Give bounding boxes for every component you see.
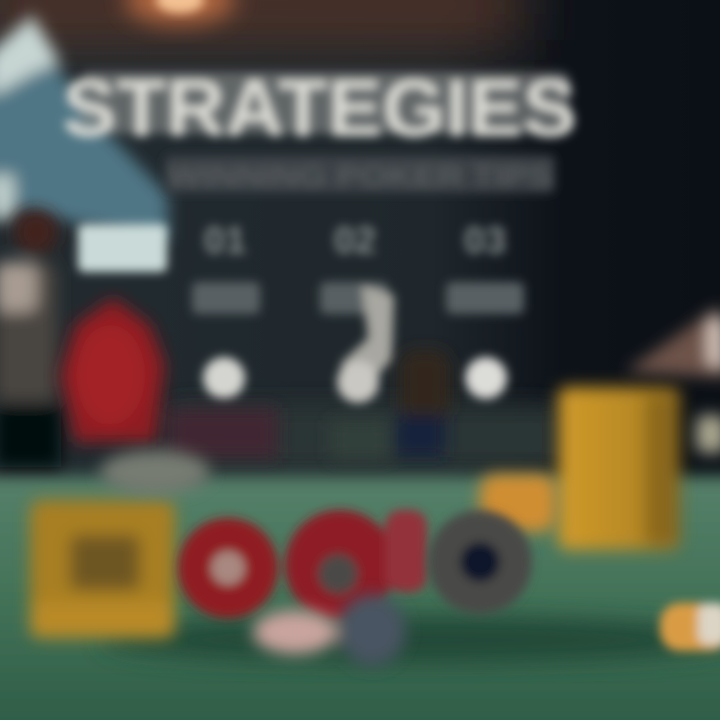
title: STRATEGIES — [62, 63, 577, 154]
right background figure — [625, 305, 720, 453]
background figures — [168, 350, 450, 460]
gold dice block — [30, 500, 175, 638]
orange chip — [480, 474, 556, 532]
mountain backdrop — [0, 15, 168, 240]
subtitle: WINNING POKER TIPS — [168, 160, 552, 193]
table surface — [0, 476, 720, 720]
red chips — [178, 510, 427, 620]
red figure — [60, 298, 165, 442]
column two — [320, 220, 394, 403]
column one — [192, 220, 260, 399]
column two: 02 — [334, 220, 376, 262]
orange chip bottom right — [660, 603, 720, 651]
column one: 01 — [204, 220, 246, 262]
gold chip stack — [558, 387, 680, 550]
dark chip — [428, 510, 532, 614]
column three: 03 — [464, 220, 506, 262]
grey chips behind block — [100, 450, 210, 494]
column three — [446, 220, 524, 399]
person at left — [0, 210, 61, 467]
highlighted label — [78, 224, 167, 272]
small chips in front — [253, 594, 406, 666]
